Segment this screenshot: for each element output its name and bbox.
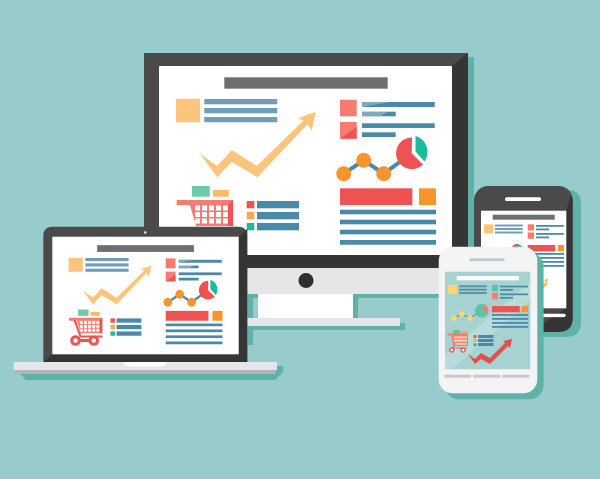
white phone speaker <box>469 258 505 261</box>
black phone home bar <box>539 314 566 317</box>
laptop screen <box>52 237 239 354</box>
monitor shadow <box>248 57 474 345</box>
monitor stand <box>240 294 400 326</box>
laptop camera <box>144 231 146 234</box>
monitor bezel <box>144 53 468 268</box>
monitor screen <box>159 66 452 255</box>
black phone shadow <box>500 190 581 337</box>
laptop lid <box>43 227 247 362</box>
black phone body <box>474 186 573 332</box>
black phone speaker <box>505 197 541 201</box>
black phone dashboard <box>484 215 564 293</box>
white phone shadow <box>445 253 544 399</box>
black phone side shading <box>530 195 573 332</box>
monitor chin <box>144 268 468 294</box>
desktop monitor <box>144 53 474 345</box>
monitor camera button <box>298 273 314 288</box>
white phone body <box>439 247 537 393</box>
laptop dashboard <box>69 245 223 344</box>
white phone <box>439 247 544 399</box>
white phone bottom buttons <box>444 375 529 378</box>
laptop cart wheels <box>72 320 102 344</box>
black phone screen <box>481 211 566 308</box>
white phone dashboard <box>448 276 528 364</box>
monitor dashboard <box>176 77 436 245</box>
laptop <box>14 227 283 380</box>
white phone screen <box>445 272 530 369</box>
laptop base <box>14 362 277 374</box>
laptop shadow <box>18 366 283 380</box>
black phone <box>474 186 581 337</box>
